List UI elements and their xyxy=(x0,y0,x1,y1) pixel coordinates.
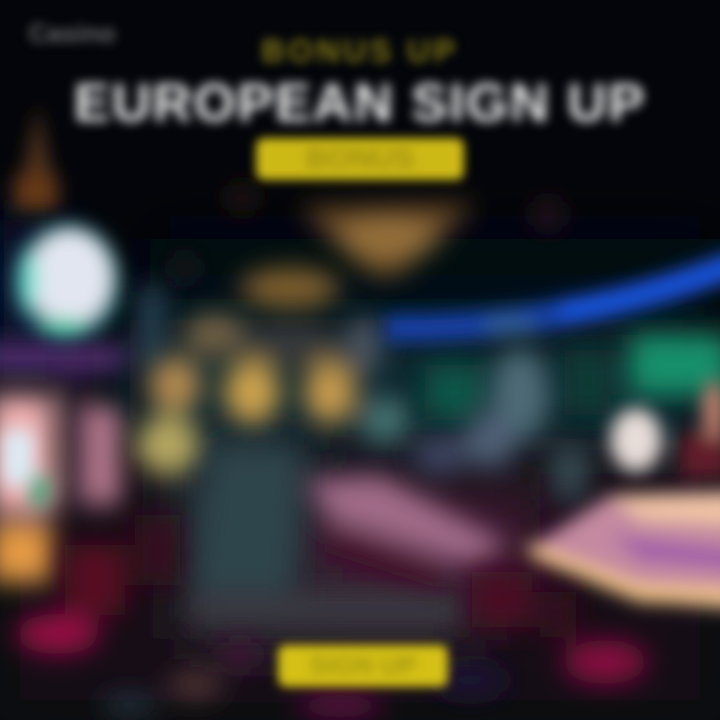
badge text: BONUS xyxy=(306,142,414,175)
green back wall xyxy=(425,335,720,420)
centre gaming table xyxy=(305,475,510,587)
yellow call-to-action button xyxy=(278,645,448,687)
logo text: Casino xyxy=(29,18,115,48)
grey patrons in the background xyxy=(412,349,588,500)
blue neon ceiling band xyxy=(385,262,720,336)
right glowing gaming table xyxy=(525,490,720,610)
ambient room colour xyxy=(0,220,720,720)
kicker heading: BONUS UP xyxy=(262,33,458,69)
right croupier figure xyxy=(610,380,720,478)
central aisle xyxy=(190,450,460,624)
gold diamond emblem xyxy=(300,204,475,276)
button text: SIGN UP xyxy=(310,650,416,680)
ceiling pendant lamp xyxy=(14,105,58,210)
left seating xyxy=(16,515,180,654)
roulette wheel xyxy=(14,222,122,342)
golden lights cluster xyxy=(136,268,411,475)
left slot machine xyxy=(0,285,164,582)
slot machine screen xyxy=(2,430,48,505)
foreground seats xyxy=(102,572,647,718)
small ceiling lights xyxy=(173,184,562,280)
yellow badge xyxy=(256,138,464,180)
main title: EUROPEAN SIGN UP xyxy=(74,73,646,133)
